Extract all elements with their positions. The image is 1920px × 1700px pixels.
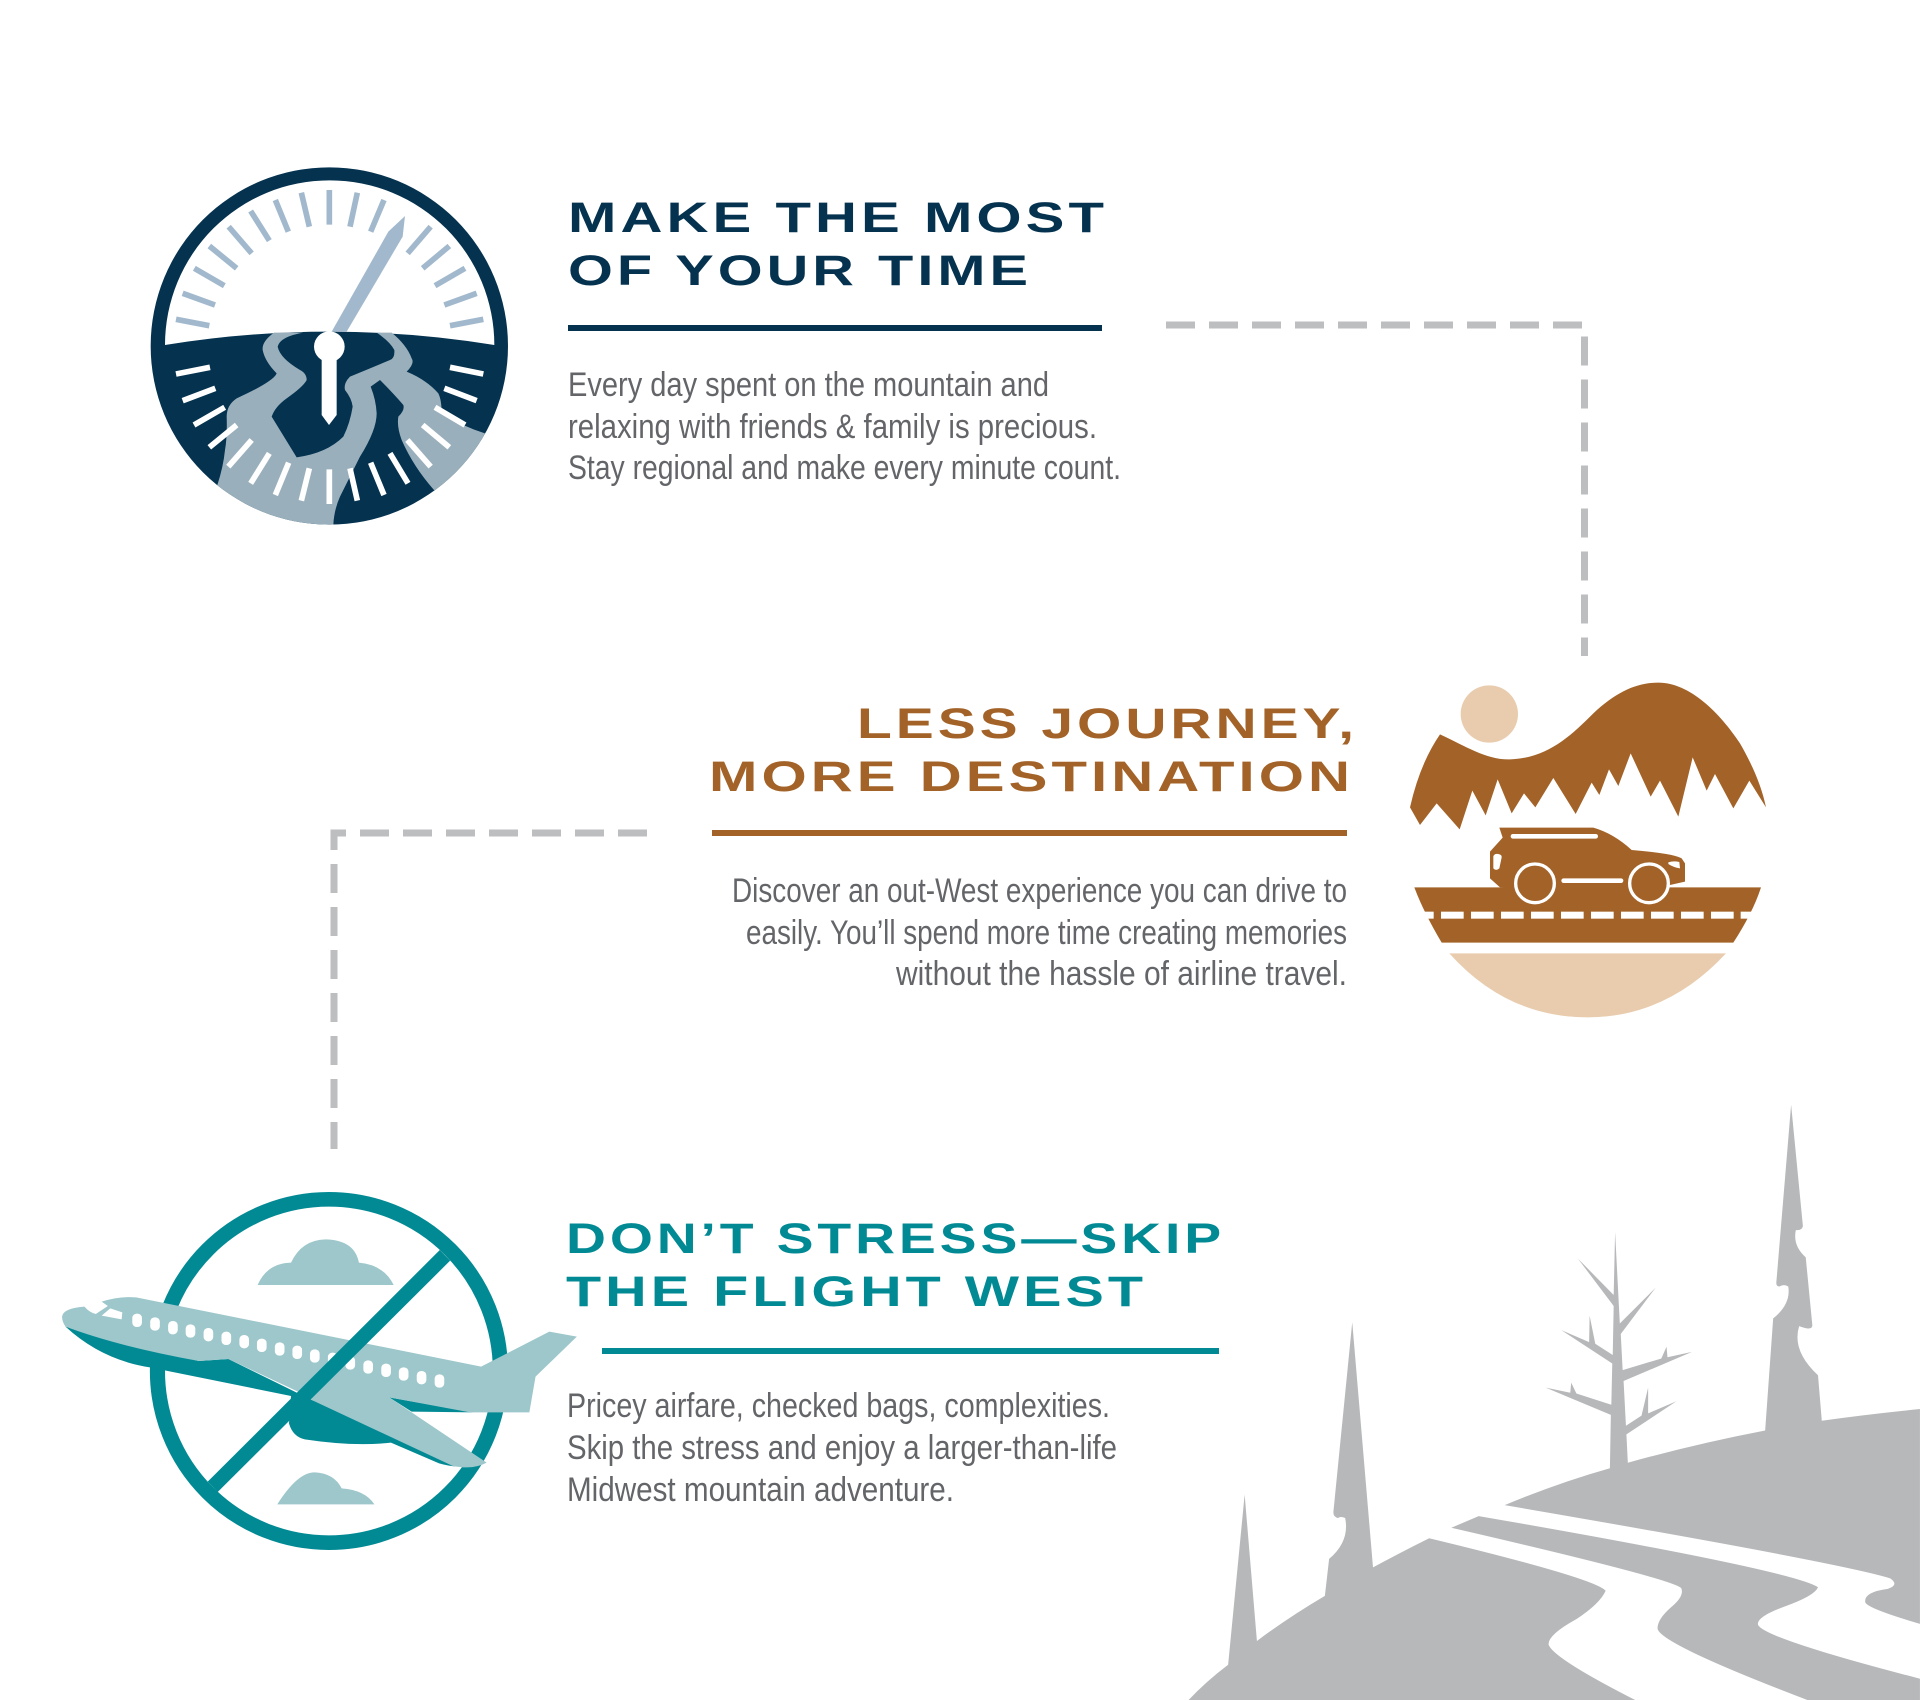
body text: Every day spent on the mountain and: [568, 366, 1049, 404]
body text: [568, 366, 1121, 487]
heading: make the most of your time: OF YOUR TIME: [568, 247, 1032, 295]
heading: don't stress, skip the flight west: THE FLIGHT WEST: [566, 1268, 1147, 1316]
body text: [732, 872, 1347, 993]
body text: Discover an out-West experience you can drive to: [732, 872, 1347, 910]
rule: [712, 830, 1347, 836]
body text: Pricey airfare, checked bags, complexities.: [567, 1387, 1110, 1425]
icon: car on road with mountains: [1410, 683, 1766, 1017]
heading: make the most of your time: MAKE THE MOST: [568, 194, 1108, 242]
heading: don't stress, skip the flight west: [566, 1215, 1225, 1316]
body text: Stay regional and make every minute count.: [568, 449, 1121, 487]
section: don't stress, skip the flight west: [566, 1215, 1225, 1509]
body text: easily. You’ll spend more time creating memories: [746, 914, 1347, 952]
body text: without the hassle of airline travel.: [895, 955, 1347, 993]
body text: relaxing with friends & family is precious.: [568, 408, 1097, 446]
heading: less journey, more destination: MORE DESTINATION: [709, 753, 1354, 801]
dashed connector: time to journey: [1166, 325, 1584, 656]
icon: airplane with prohibition sign: [62, 1199, 577, 1543]
heading: don't stress, skip the flight west: DON’T STRESS—SKIP: [566, 1215, 1225, 1263]
rule: [602, 1348, 1219, 1354]
heading: less journey, more destination: [709, 700, 1358, 801]
body text: Skip the stress and enjoy a larger-than-life: [567, 1429, 1117, 1467]
body text: [567, 1387, 1117, 1509]
body text: Midwest mountain adventure.: [567, 1471, 954, 1509]
rule: [568, 325, 1102, 331]
landscape silhouette: [1188, 1105, 1920, 1700]
section: less journey, more destination: [709, 700, 1358, 993]
dashed connector: journey to flight: [334, 833, 647, 1149]
heading: make the most of your time: [568, 194, 1108, 295]
heading: less journey, more destination: LESS JOURNEY,: [857, 700, 1358, 748]
icon: gauge with river: [151, 167, 508, 550]
section: make the most of your time: [568, 194, 1121, 487]
